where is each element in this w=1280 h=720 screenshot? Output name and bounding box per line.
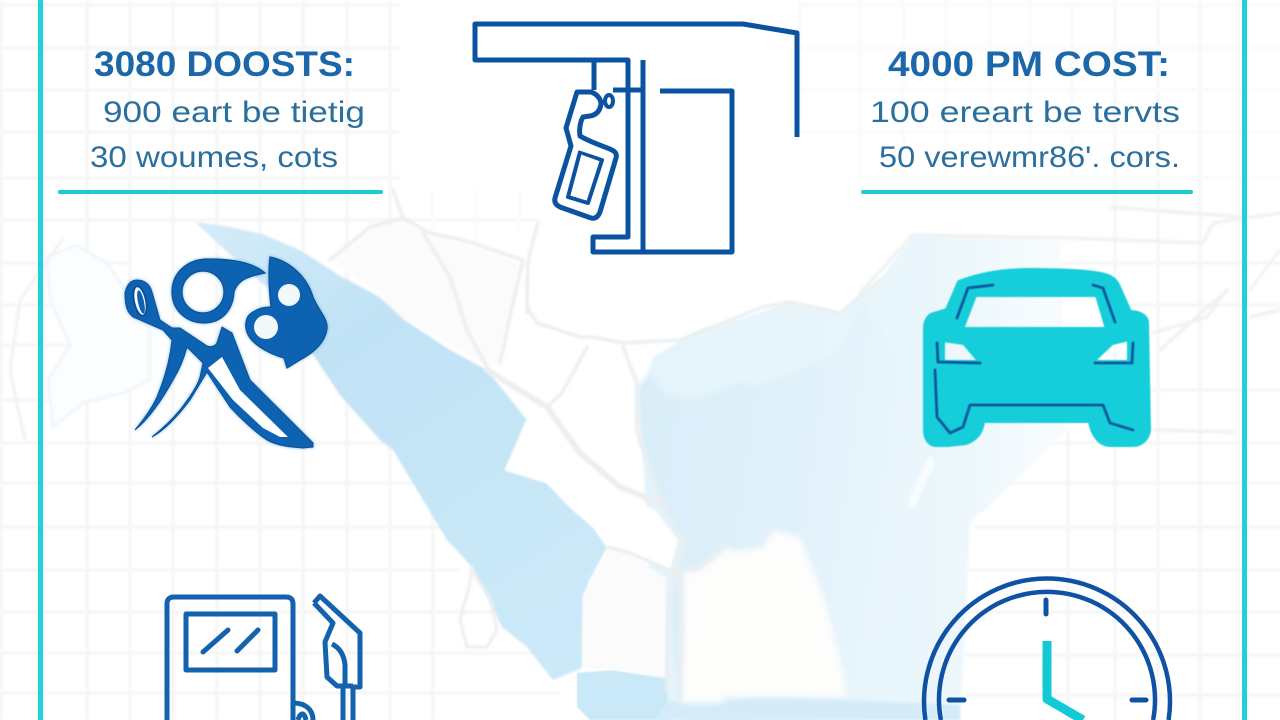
figure ring bbox=[172, 259, 265, 323]
pale water on the right bbox=[640, 235, 1067, 720]
text line: right 2: 50 verewmr86'. cors. bbox=[879, 141, 1180, 174]
pump body bbox=[167, 597, 293, 720]
icon: abstract figure with mask bbox=[125, 257, 327, 448]
icon: clock bbox=[924, 578, 1170, 720]
nozzle bbox=[314, 596, 360, 720]
frame line: left bbox=[38, 0, 43, 720]
pale inlet on the left bbox=[47, 245, 150, 427]
nozzle handle bbox=[555, 92, 616, 218]
hose arch bbox=[293, 703, 313, 720]
icon: fuel pump bbox=[167, 596, 360, 720]
white channel on the right bbox=[910, 457, 933, 507]
divider: right bbox=[861, 190, 1193, 194]
panel: right cost text bbox=[861, 45, 1193, 194]
text line: left 2: 30 woumes, cots bbox=[90, 141, 338, 174]
central land wedge bbox=[505, 420, 678, 570]
screen marks bbox=[203, 630, 258, 652]
panel: left cost text bbox=[58, 45, 383, 194]
road network bbox=[10, 190, 1280, 703]
mask shape bbox=[246, 257, 327, 368]
car outline details bbox=[935, 285, 1133, 433]
figure hand loop bbox=[131, 285, 149, 317]
text line: right 1: 100 ereart be tervts bbox=[870, 96, 1180, 129]
heading: left: 3080 DOOSTS: bbox=[94, 45, 355, 84]
figure inner gap bbox=[208, 357, 288, 437]
text line: left 1: 900 eart be tietig bbox=[103, 96, 365, 129]
upper land parcels bbox=[335, 222, 520, 365]
clock outer ring bbox=[924, 578, 1170, 720]
land block south of the band bbox=[583, 551, 666, 678]
bottom water pool bbox=[577, 670, 668, 720]
figure body bbox=[125, 280, 313, 448]
mask hole lower bbox=[254, 315, 278, 339]
clock hands bbox=[1047, 641, 1083, 720]
icon: fuel station canopy with nozzle bbox=[475, 24, 797, 252]
frame line: right bbox=[1242, 0, 1247, 720]
deeper water on the right bbox=[637, 300, 930, 720]
mask hole upper bbox=[278, 284, 300, 306]
divider: left bbox=[58, 190, 383, 194]
clock inner ring bbox=[939, 592, 1155, 720]
main water band bbox=[195, 222, 607, 680]
icon: car front view bbox=[925, 270, 1149, 445]
car body bbox=[925, 270, 1149, 445]
heading: right: 4000 PM COST: bbox=[888, 45, 1170, 84]
land block south of the junction bbox=[682, 530, 845, 703]
pump screen bbox=[186, 614, 275, 670]
clock ticks bbox=[949, 600, 1146, 700]
